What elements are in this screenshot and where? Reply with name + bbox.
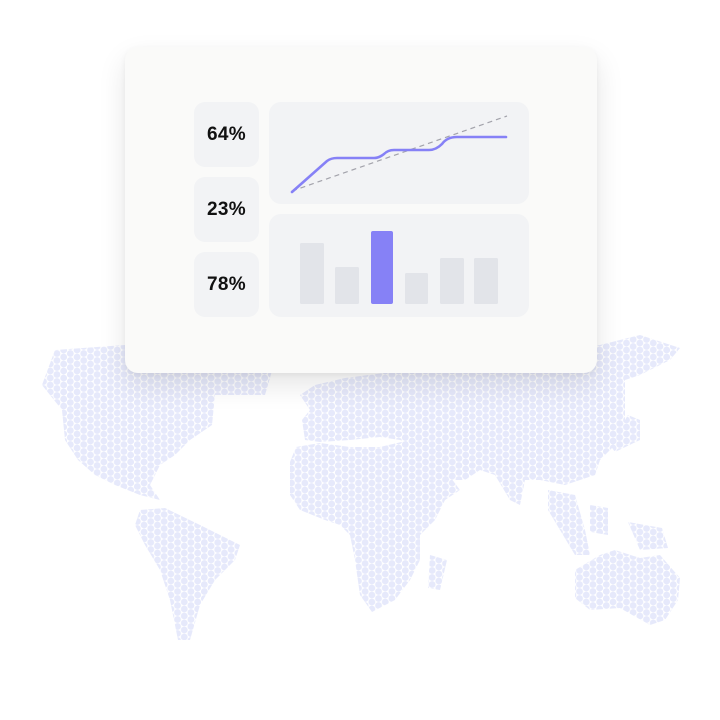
stat: 64%: 64% — [207, 124, 246, 144]
south america — [135, 508, 240, 640]
stat: 23%: 23% — [207, 198, 246, 220]
africa — [290, 440, 460, 612]
australia — [575, 550, 680, 625]
highlighted bar — [371, 231, 393, 304]
line chart panel — [269, 102, 529, 204]
stat: 78%: 78% — [207, 274, 246, 294]
madagascar — [428, 555, 447, 590]
eurasia — [300, 335, 680, 505]
bar chart panel — [269, 214, 529, 317]
trend line dashed — [292, 116, 507, 191]
north america — [42, 340, 280, 500]
stat: 23% — [194, 177, 259, 242]
stat: 64% — [194, 102, 259, 167]
japan — [610, 415, 640, 452]
dashboard card — [125, 47, 597, 373]
data line — [292, 137, 506, 192]
stat: 78% — [194, 252, 259, 317]
southeast asia — [548, 490, 590, 555]
